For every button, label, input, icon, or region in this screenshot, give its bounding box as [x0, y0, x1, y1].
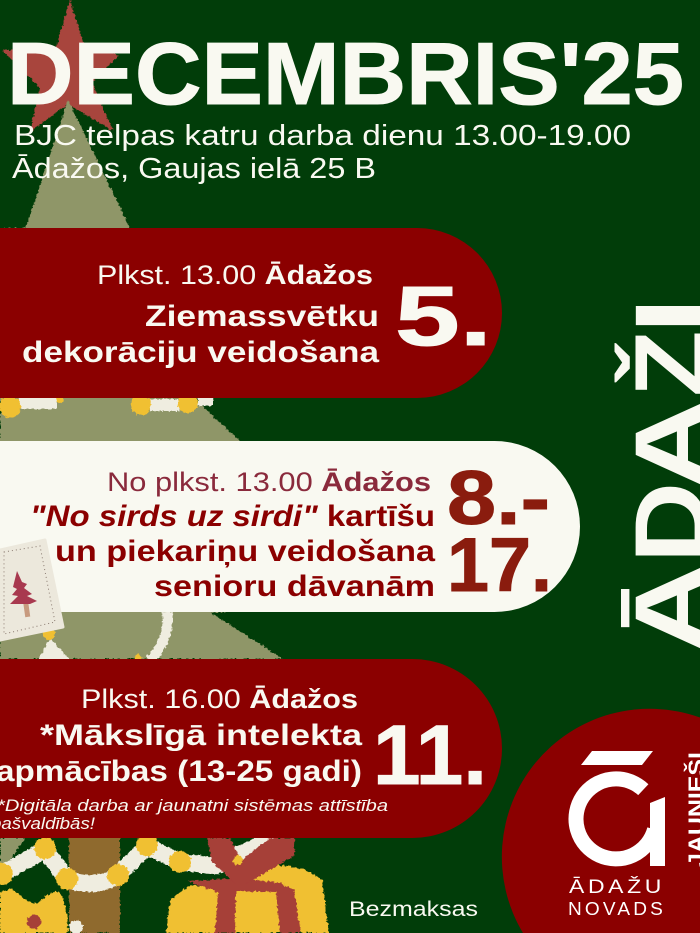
free admission note: Bezmaksas [349, 898, 478, 921]
panel: 11 December event [0, 659, 502, 838]
event title: "No sirds uz sirdi" kartīšu [30, 500, 435, 533]
icon: logo letter a [576, 751, 665, 866]
illustration: christmas tree with star [0, 0, 329, 933]
lower garland [0, 834, 275, 890]
event title: dekorāciju veidošana [22, 336, 379, 369]
logo circle [502, 709, 700, 933]
event title: senioru dāvanām [154, 570, 435, 603]
event time: Plkst. 13.00 Ādažos [97, 260, 373, 290]
event title: Ziemassvētku [145, 300, 379, 333]
logo circle: NOVADS [568, 899, 666, 919]
logo wordmark: ĀDAŽU [569, 876, 665, 898]
event title: *Mākslīgā intelekta [40, 719, 362, 752]
vertical heading [614, 297, 700, 654]
event title: un piekariņu veidošana [55, 535, 435, 568]
tree trunk [69, 836, 120, 933]
subtitle: opening hours: BJC telpas katru darba dienu 13.00-19.00 [14, 120, 631, 152]
event time: Plkst. 16.00 Ādažos [81, 684, 358, 714]
panel: 8-17 December event [0, 441, 580, 640]
icon: yellow bow [0, 889, 83, 933]
event time: No plkst. 13.00 Ādažos [107, 467, 431, 497]
date number: 11. [373, 708, 487, 802]
icon: gift box [166, 838, 329, 933]
icon: tree star [2, 0, 119, 132]
event title: apmācības (13-25 gadi) [0, 755, 362, 788]
icon: postage stamp with tree [0, 540, 63, 640]
middle garland [38, 612, 167, 662]
date numbers [447, 456, 552, 608]
date numbers: 17. [447, 523, 552, 608]
footnote: *Digitāla darba ar jaunatni sistēmas attīstība [0, 796, 388, 815]
date numbers: 8.- [447, 456, 550, 541]
event title [0, 719, 362, 788]
date number: 5. [395, 269, 492, 363]
tree lower corner [0, 838, 25, 875]
tree body [0, 100, 283, 659]
subtitle: address: Ādažos, Gaujas ielā 25 B [12, 153, 376, 185]
footnote [0, 796, 388, 833]
event title [22, 300, 379, 369]
upper garland [0, 393, 213, 418]
panel: 5 December event [0, 228, 502, 398]
title: DECEMBRIS'25 [7, 24, 684, 123]
event title [30, 500, 435, 603]
